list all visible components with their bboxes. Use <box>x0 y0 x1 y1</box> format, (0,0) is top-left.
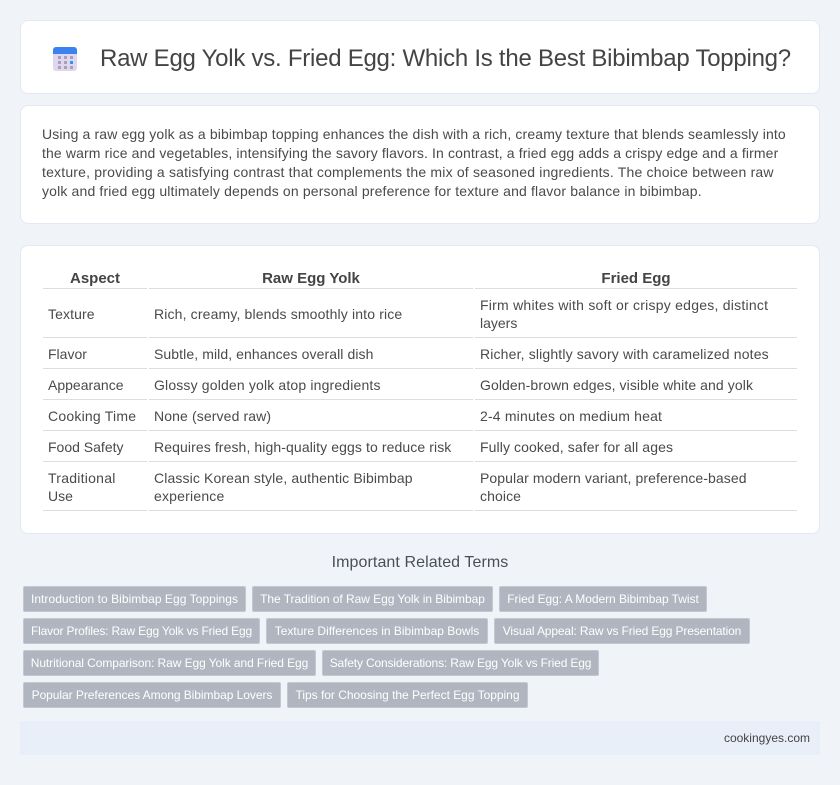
row: appearance: Glossy golden yolk atop ingredients <box>154 377 381 393</box>
row: traditional use: choice <box>480 488 521 504</box>
row: cooking time: None (served raw) <box>154 408 271 424</box>
tag: Tips for Choosing the Perfect Egg Topping <box>296 688 519 702</box>
row: food safety <box>48 439 673 455</box>
tag <box>266 618 488 644</box>
comparison table panel <box>20 245 820 534</box>
row: traditional use: experience <box>154 488 224 504</box>
tag: Fried Egg: A Modern Bibimbap Twist <box>507 592 699 606</box>
row: traditional use <box>48 470 747 504</box>
tag: Texture Differences in Bibimbap Bowls <box>275 624 479 638</box>
table header: Fried Egg <box>601 270 671 287</box>
footer bar <box>20 721 820 755</box>
row: flavor: Flavor <box>48 346 87 362</box>
row: food safety: Requires fresh, high-quality eggs to reduce risk <box>154 439 451 455</box>
tag <box>23 586 246 612</box>
footer source: cookingyes.com <box>724 731 810 745</box>
row: appearance <box>48 377 753 393</box>
row: cooking time: Cooking Time <box>48 408 136 424</box>
row: texture <box>48 297 768 331</box>
row: appearance: Appearance <box>48 377 124 393</box>
header panel <box>20 20 820 94</box>
icon: calendar <box>53 47 77 71</box>
tag: Introduction to Bibimbap Egg Toppings <box>31 592 238 606</box>
table header: Aspect <box>70 270 120 287</box>
tag <box>23 682 281 708</box>
row: texture: Texture <box>48 306 95 322</box>
row: texture: layers <box>480 315 517 331</box>
related terms heading: Important Related Terms <box>332 554 508 571</box>
intro paragraph: texture, providing a satisfying contrast that complements the mix of seasoned ingredients. The choice between raw <box>42 164 774 180</box>
row: traditional use: Popular modern variant, preference-based <box>480 470 747 486</box>
intro paragraph: the warm rice and vegetables, intensifying the savory flavors. In contrast, a fried egg adds a crispy edge and a firmer <box>42 145 778 161</box>
tag <box>322 650 599 676</box>
tag: The Tradition of Raw Egg Yolk in Bibimbap <box>260 592 485 606</box>
row: texture: Firm whites with soft or crispy edges, distinct <box>480 297 768 313</box>
tag <box>252 586 493 612</box>
comparison table <box>43 270 797 511</box>
tag: Nutritional Comparison: Raw Egg Yolk and Fried Egg <box>31 656 308 670</box>
table header: Raw Egg Yolk <box>262 270 360 287</box>
tag: Safety Considerations: Raw Egg Yolk vs Fried Egg <box>330 656 591 670</box>
row: traditional use: Use <box>48 488 73 504</box>
tag <box>494 618 750 644</box>
row: appearance: Golden-brown edges, visible white and yolk <box>480 377 753 393</box>
tag <box>23 618 260 644</box>
tag: Flavor Profiles: Raw Egg Yolk vs Fried Egg <box>31 624 252 638</box>
title: Raw Egg Yolk vs. Fried Egg: Which Is the Best Bibimbap Topping? <box>100 45 791 72</box>
row: cooking time <box>48 408 662 424</box>
row: traditional use: Traditional <box>48 470 116 486</box>
intro paragraph: Using a raw egg yolk as a bibimbap topping enhances the dish with a rich, creamy texture that blends seamlessly into <box>42 126 786 142</box>
row: flavor: Subtle, mild, enhances overall dish <box>154 346 374 362</box>
intro paragraph: yolk and fried egg ultimately depends on personal preference for texture and flavor balance in bibimbap. <box>42 183 702 199</box>
tag <box>287 682 528 708</box>
related term tags <box>23 586 750 708</box>
tag <box>499 586 707 612</box>
row: flavor: Richer, slightly savory with caramelized notes <box>480 346 769 362</box>
intro paragraph <box>42 126 786 199</box>
row: texture: Rich, creamy, blends smoothly into rice <box>154 306 402 322</box>
intro text panel <box>20 105 820 224</box>
row: food safety: Fully cooked, safer for all ages <box>480 439 673 455</box>
table header <box>70 270 671 287</box>
tag: Visual Appeal: Raw vs Fried Egg Presentation <box>503 624 741 638</box>
tag: Popular Preferences Among Bibimbap Lovers <box>32 688 272 702</box>
row: traditional use: Classic Korean style, authentic Bibimbap <box>154 470 413 486</box>
row: cooking time: 2-4 minutes on medium heat <box>480 408 662 424</box>
tag <box>23 650 316 676</box>
row: flavor <box>48 346 769 362</box>
row: food safety: Food Safety <box>48 439 124 455</box>
